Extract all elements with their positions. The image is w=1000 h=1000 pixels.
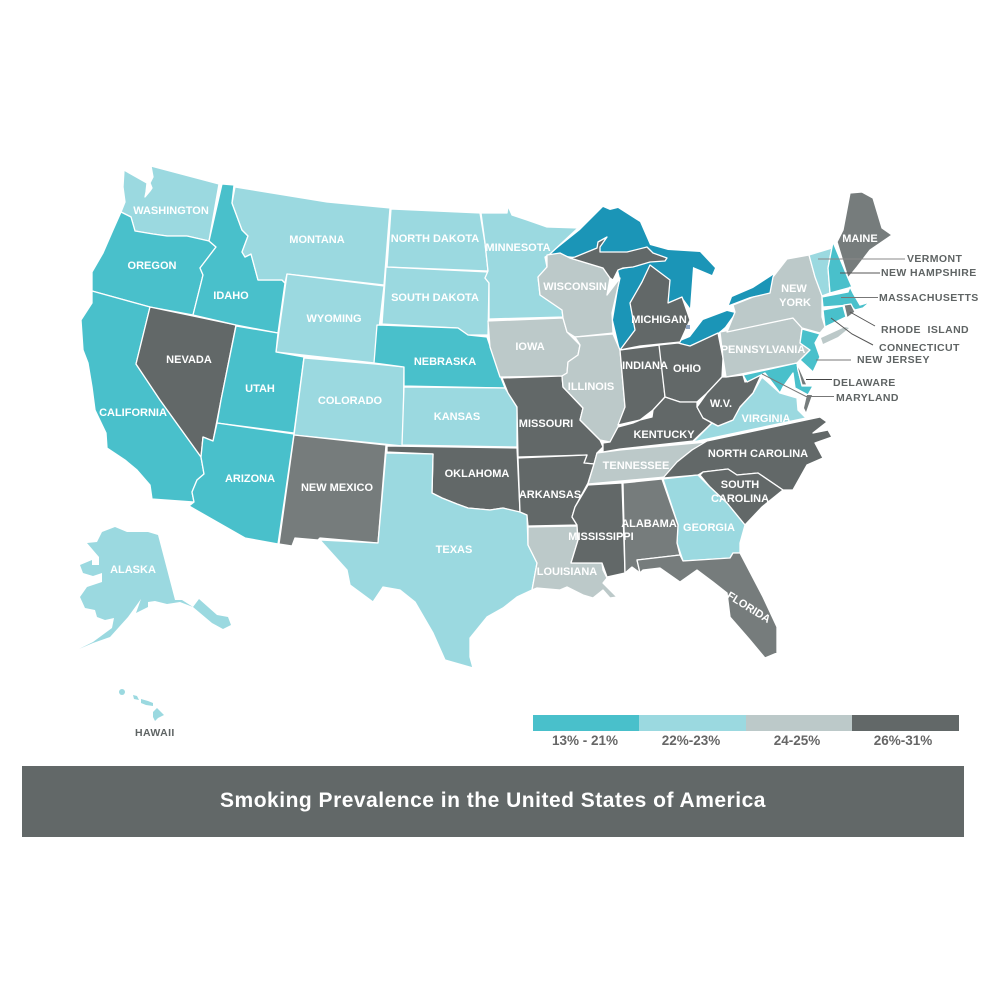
- state: Alaska: [79, 527, 231, 649]
- label: Michigan: MICHIGAN: [631, 314, 687, 326]
- state: Mississippi: [571, 483, 625, 577]
- label: Colorado: COLORADO: [318, 395, 383, 407]
- state: Maine: [837, 192, 892, 278]
- state: North Carolina: [663, 417, 832, 490]
- state: Pennsylvania: [720, 318, 810, 377]
- state: Connecticut: [823, 306, 846, 327]
- state: Louisiana: [528, 526, 617, 598]
- state: Montana: [232, 187, 390, 285]
- label: Delaware: DELAWARE: [833, 377, 896, 389]
- legend label: 13% - 21%: 13% - 21%: [552, 733, 618, 748]
- label: Arizona: ARIZONA: [225, 473, 275, 485]
- label: Louisiana: LOUISIANA: [537, 566, 597, 578]
- state: Michigan lower peninsula: [620, 265, 690, 350]
- map of the United States: [79, 166, 892, 721]
- state: Massachusetts: [822, 287, 870, 310]
- state: Oklahoma: [387, 446, 527, 515]
- state: South Dakota: [382, 267, 489, 335]
- callout line: Rhode Island: [850, 312, 875, 326]
- label: Hawaii: HAWAII: [135, 727, 175, 739]
- great lake: Michigan: [613, 265, 650, 350]
- legend swatch: 26%-31%: [852, 715, 959, 731]
- state: Delaware: [797, 363, 807, 385]
- label: Arkansas: ARKANSAS: [519, 489, 581, 501]
- state: Wisconsin: [538, 253, 620, 337]
- state: New Hampshire: [828, 242, 852, 293]
- label: Ohio: OHIO: [673, 363, 701, 375]
- label: South Dakota: SOUTH DAKOTA: [391, 292, 479, 304]
- state: Vermont: [809, 248, 832, 296]
- state: West Virginia: [697, 373, 762, 426]
- state: Arkansas: [518, 455, 594, 526]
- state: Iowa: [488, 318, 580, 377]
- state: Ohio: [659, 333, 723, 402]
- legend label: 22%-23%: 22%-23%: [662, 733, 720, 748]
- callout line: Massachusetts: [841, 296, 878, 298]
- state: Kentucky: [603, 397, 712, 452]
- state: Michigan upper peninsula: [570, 237, 667, 280]
- label: Mississippi: MISSISSIPPI: [568, 531, 634, 543]
- great lake: Erie: [678, 311, 735, 346]
- label: Wisconsin: WISCONSIN: [543, 281, 607, 293]
- label: Tennessee: TENNESSEE: [603, 460, 669, 472]
- label: Washington: WASHINGTON: [133, 205, 209, 217]
- label: Alaska: ALASKA: [110, 564, 156, 576]
- state: Tennessee: [588, 442, 707, 484]
- state: Colorado: [294, 358, 404, 446]
- label: Florida: FLORIDA: [725, 590, 772, 626]
- label: Iowa: IOWA: [515, 341, 545, 353]
- label: South Carolina line two: CAROLINA: [711, 493, 769, 505]
- state: Idaho: [193, 184, 285, 333]
- state: New Jersey: [800, 329, 820, 372]
- callout line: Delaware: [806, 378, 832, 380]
- label: South Carolina: SOUTH: [721, 479, 759, 491]
- label: Idaho: IDAHO: [213, 290, 249, 302]
- great lake: Ontario: [729, 275, 773, 305]
- state: Arizona: [189, 423, 294, 544]
- callout line: New Hampshire: [840, 272, 880, 274]
- callout line: New Jersey: [816, 359, 851, 361]
- label: Connecticut: CONNECTICUT: [879, 342, 960, 354]
- legend label: 24-25%: 24-25%: [774, 733, 820, 748]
- state: Florida: [637, 553, 777, 658]
- state: Nevada: [136, 307, 236, 457]
- label: Illinois: ILLINOIS: [568, 381, 614, 393]
- state: Hawaii: [119, 689, 164, 721]
- label: Rhode Island: RHODE ISLAND: [881, 324, 969, 336]
- state: Maryland: [743, 363, 813, 395]
- state: Minnesota: [481, 206, 578, 319]
- callout line: Connecticut: [831, 318, 873, 345]
- leader lines and labels for small states: [135, 253, 979, 739]
- state: Illinois: [562, 334, 625, 442]
- label: Nebraska: NEBRASKA: [414, 356, 476, 368]
- label: Utah: UTAH: [245, 383, 275, 395]
- label: New Jersey: NEW JERSEY: [857, 354, 930, 366]
- state: Texas: [320, 453, 537, 668]
- label: Kentucky: KENTUCKY: [633, 429, 695, 441]
- legend: [533, 715, 959, 748]
- state: Kansas: [402, 387, 517, 447]
- state: Georgia: [663, 475, 745, 561]
- label: West Virginia: W.V.: [710, 398, 732, 410]
- label: New York: NEW: [781, 283, 807, 295]
- state: Virginia eastern shore: [804, 395, 812, 412]
- label: New Mexico: NEW MEXICO: [301, 482, 373, 494]
- state: Virginia: [693, 377, 806, 442]
- state: Wyoming: [276, 274, 384, 363]
- label: Maine: MAINE: [842, 233, 878, 245]
- label: Oregon: OREGON: [128, 260, 176, 272]
- label: Georgia: GEORGIA: [683, 522, 735, 534]
- state: South Carolina: [700, 469, 783, 525]
- title: Smoking Prevalence in the United States of America: [220, 789, 766, 812]
- label: Massachusetts: MASSACHUSETTS: [879, 292, 979, 304]
- label: Kansas: KANSAS: [434, 411, 480, 423]
- label: Missouri: MISSOURI: [519, 418, 573, 430]
- label: New Hampshire: NEW HAMPSHIRE: [881, 267, 977, 279]
- label: Texas: TEXAS: [436, 544, 472, 556]
- state: Rhode Island: [844, 304, 855, 318]
- state: New York: [727, 255, 825, 333]
- callout line: Vermont: [818, 258, 905, 260]
- label: Alabama: ALABAMA: [621, 518, 677, 530]
- state: New York, Long Island: [821, 327, 849, 344]
- label: North Dakota: NORTH DAKOTA: [391, 233, 479, 245]
- label: Minnesota: MINNESOTA: [485, 242, 551, 254]
- label: Nevada: NEVADA: [166, 354, 212, 366]
- state name labels on the map: [99, 205, 878, 626]
- state: Washington: [121, 166, 219, 241]
- state: North Dakota: [387, 209, 488, 271]
- state: Alabama: [623, 479, 680, 573]
- label: Montana: MONTANA: [289, 234, 345, 246]
- great lakes: Superior and Huron: [550, 207, 715, 308]
- label: Virginia: VIRGINIA: [742, 413, 790, 425]
- state: Oregon: [92, 212, 216, 315]
- label: Pennsylvania: PENNSYLVANIA: [721, 344, 805, 356]
- label: California: CALIFORNIA: [99, 407, 167, 419]
- state: Nebraska: [374, 325, 505, 388]
- label: Indiana: INDIANA: [622, 360, 668, 372]
- state: California: [81, 291, 204, 502]
- label: Vermont: VERMONT: [907, 253, 962, 265]
- state: Utah: [217, 326, 304, 433]
- label: Oklahoma: OKLAHOMA: [445, 468, 509, 480]
- state: New Mexico: [279, 435, 386, 546]
- title banner: [22, 766, 964, 837]
- small water patch by Michigan: [686, 325, 690, 329]
- callout line: Maryland: [762, 374, 834, 396]
- legend swatch: 22%-23%: [639, 715, 746, 731]
- state: Missouri: [502, 376, 603, 464]
- legend swatch: 24-25%: [746, 715, 852, 731]
- label: Maryland: MARYLAND: [836, 392, 899, 404]
- legend label: 26%-31%: 26%-31%: [874, 733, 932, 748]
- label: Wyoming: WYOMING: [306, 313, 362, 325]
- label: New York line two: YORK: [779, 297, 811, 309]
- legend swatch: 13% - 21%: [533, 715, 639, 731]
- label: North Carolina: NORTH CAROLINA: [708, 448, 808, 460]
- state: Indiana: [618, 345, 665, 425]
